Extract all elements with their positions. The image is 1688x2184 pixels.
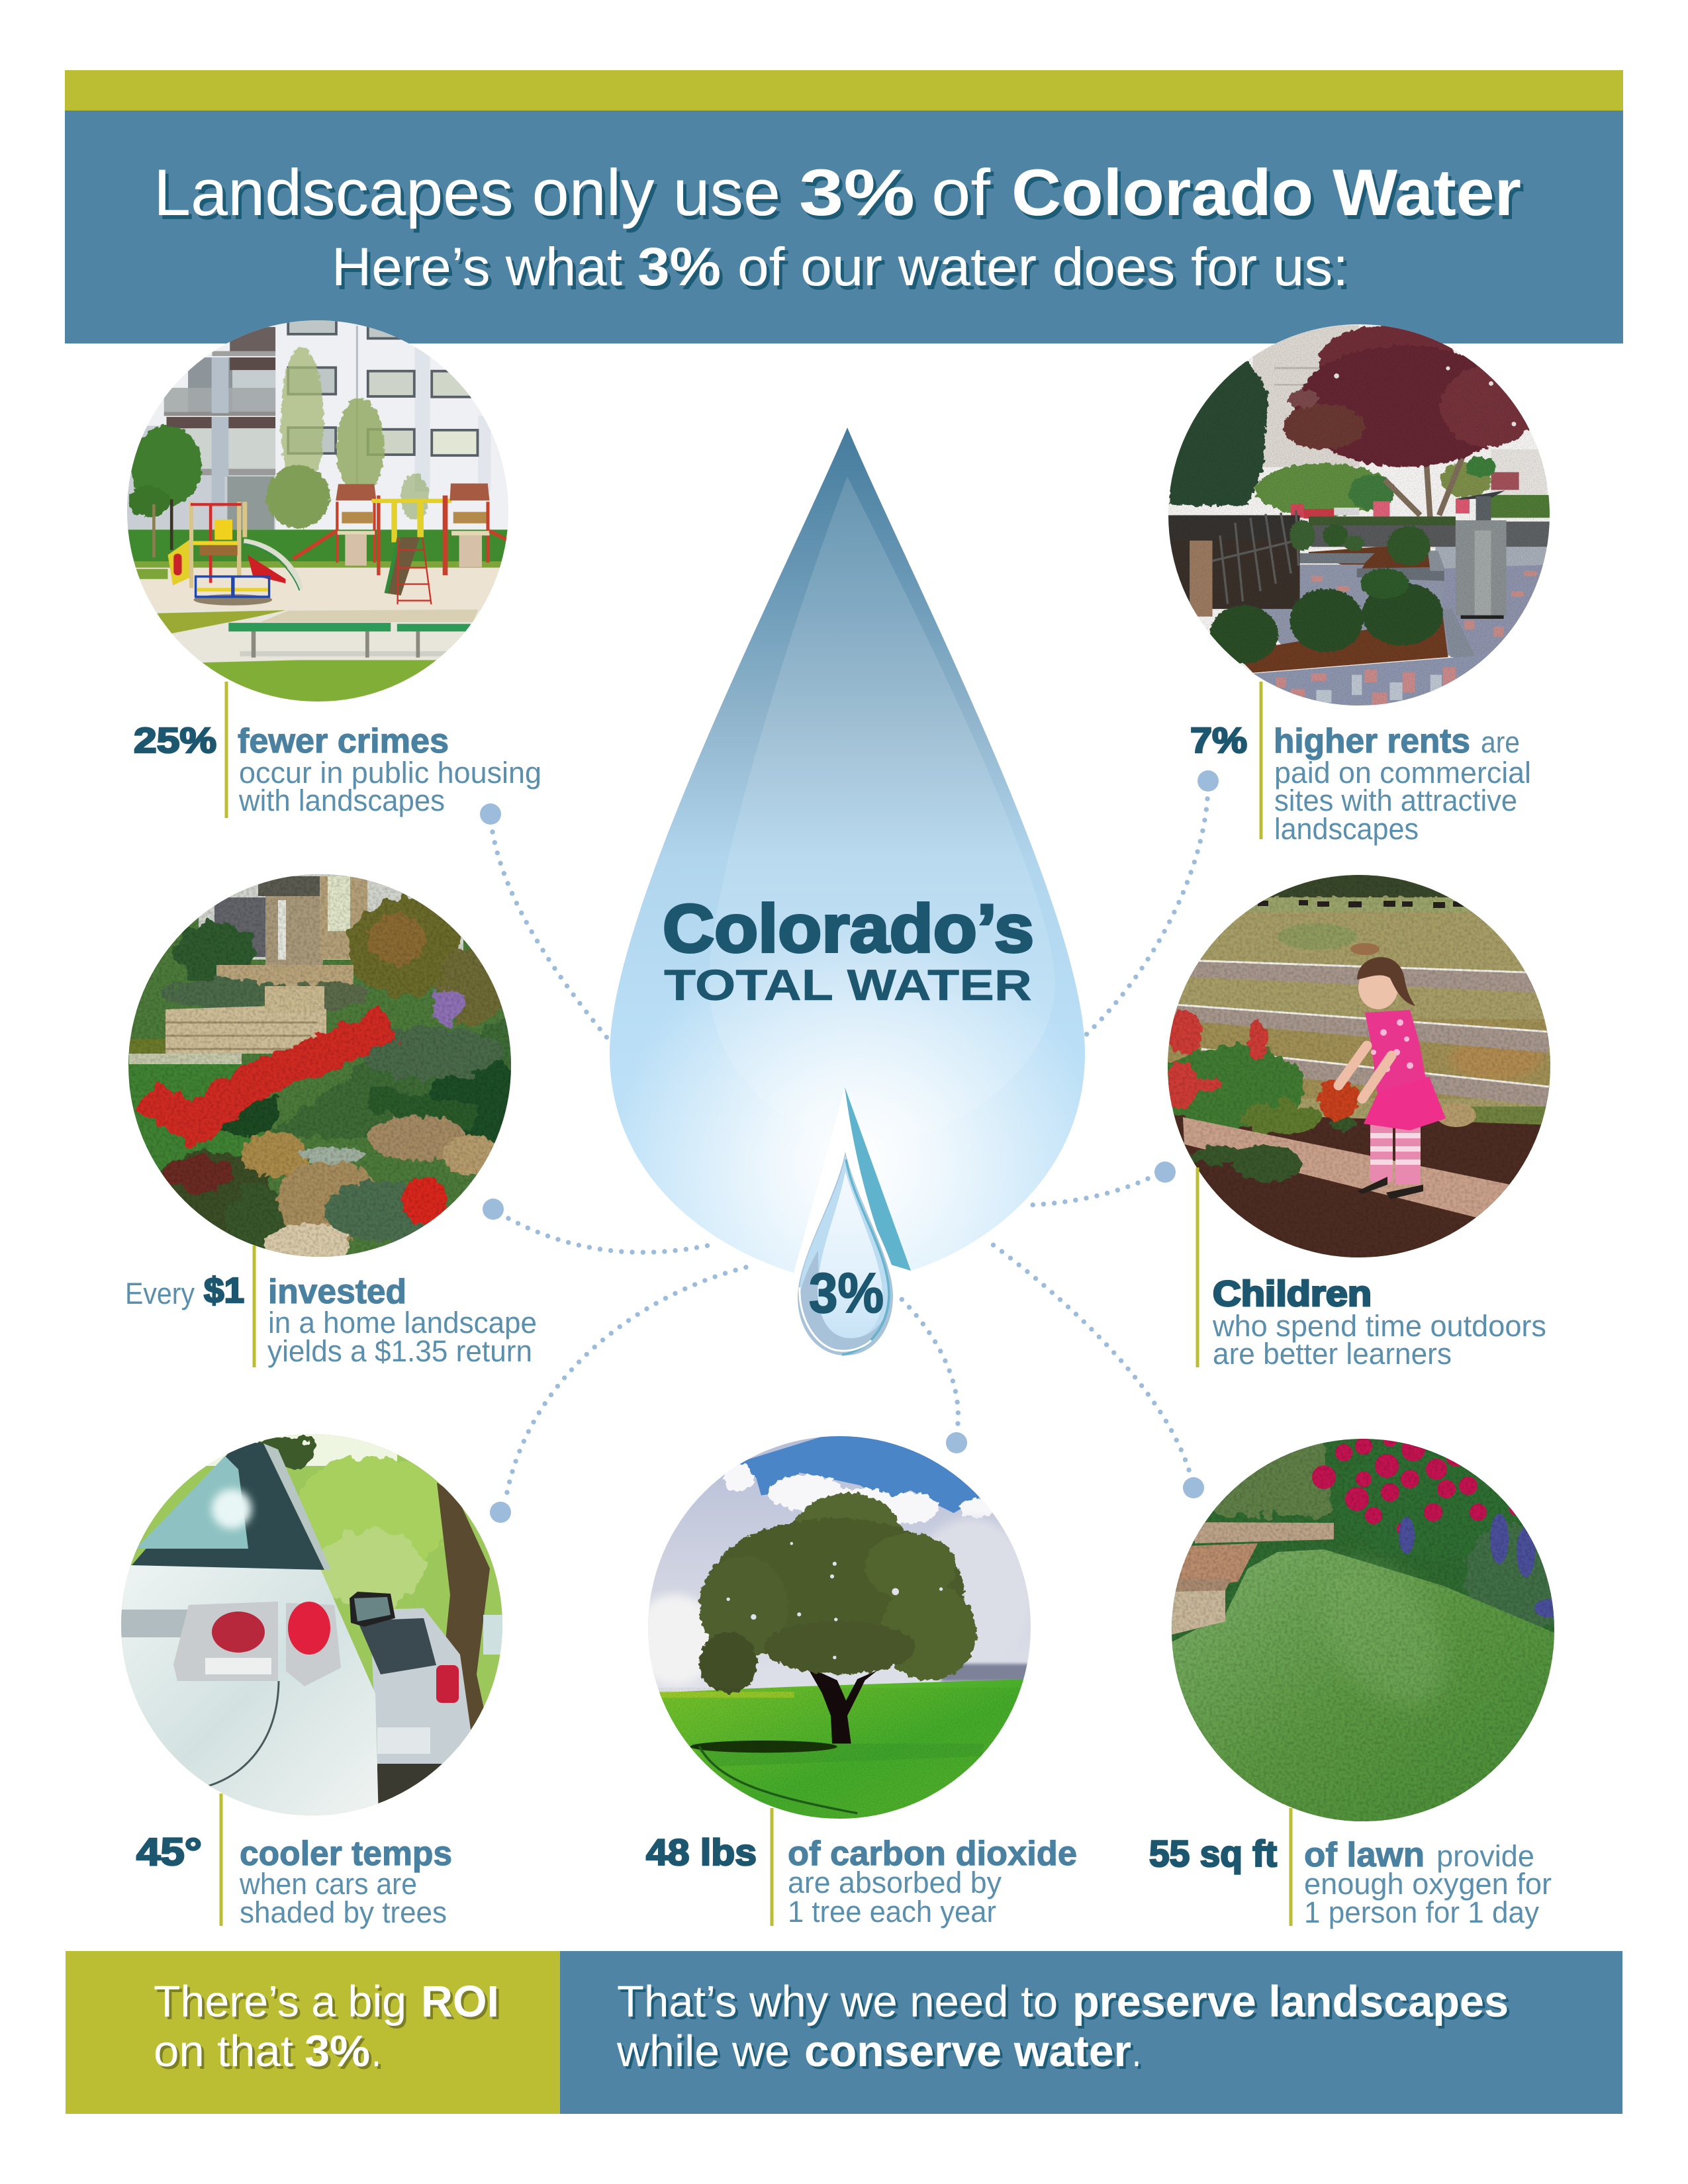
stat: 45 degrees cooler temps: cooler temps (240, 1835, 452, 1873)
dotted connector: lawn stat (990, 1242, 1204, 1498)
photo: cars shaded by trees (119, 1433, 510, 1820)
text: That's why we need to preserve landscapes while we conserve water (616, 1977, 1509, 2076)
title: Landscapes only use 3% of Colorado Water (154, 156, 1521, 229)
stat: children: who spend time outdoors (1212, 1309, 1546, 1343)
text: That's why we need to preserve landscapes while we conserve water: . (1132, 2026, 1141, 2076)
text: There's a big ROI on that 3%: on that (154, 2026, 293, 2076)
text: There's a big ROI on that 3%: There’s a big (154, 1977, 406, 2026)
stat: 48 lbs of carbon dioxide: 1 tree each year (788, 1895, 996, 1929)
subtitle: Here's what 3% of our water does for us: Here’s what (332, 237, 622, 297)
stat: 55 sq ft of lawn: 55 sq ft (1149, 1833, 1277, 1874)
dotted connector: cooler temps stat (490, 1267, 748, 1523)
stat: every $1 invested: Every (125, 1277, 195, 1310)
subtitle: Here's what 3% of our water does for us: 3% (637, 237, 721, 297)
title: Landscapes only use 3% of Colorado Water: of (931, 156, 991, 229)
stat: 7% higher rents: higher rents (1274, 722, 1470, 760)
stat: every $1 invested: $1 (204, 1271, 244, 1310)
dotted connector: children stat (1027, 1161, 1176, 1205)
photo: home landscape with red flowers (126, 874, 523, 1263)
small 3% drop (792, 1147, 898, 1361)
central water drop: Colorado's total water (610, 428, 1085, 1273)
dotted connector: crime stat (480, 803, 610, 1042)
text: That's why we need to preserve landscapes while we conserve water: preserve landscapes (1072, 1977, 1509, 2026)
text: That's why we need to preserve landscapes while we conserve water: conserve water (804, 2026, 1131, 2076)
stat: every $1 invested: in a home landscape (268, 1306, 537, 1340)
stat: children: are better learners (1213, 1337, 1452, 1371)
text: That's why we need to preserve landscapes while we conserve water: while we (616, 2026, 790, 2076)
stat: 45 degrees cooler temps: shaded by trees (240, 1895, 447, 1929)
text: That's why we need to preserve landscapes while we conserve water: That’s why we need to (617, 1977, 1058, 2026)
label: 3%: 3% (809, 1262, 884, 1325)
text: There's a big ROI on that 3%: ROI (421, 1977, 499, 2026)
photo: child in garden (1164, 874, 1556, 1264)
stat: 55 sq ft of lawn: provide (1436, 1839, 1534, 1873)
stat: 25% fewer crimes: occur in public housing (239, 756, 541, 790)
stat: 7% higher rents: sites with attractive (1274, 784, 1517, 817)
stat: 7% higher rents: landscapes (1274, 812, 1419, 846)
stat: 48 lbs of carbon dioxide (646, 1808, 1077, 1929)
stat: 48 lbs of carbon dioxide: of carbon dioxide (788, 1835, 1077, 1873)
stat: 7% higher rents: 7% (1190, 721, 1247, 760)
dotted connector: home investment stat (483, 1199, 711, 1252)
bottom panel: preserve landscapes (560, 1951, 1622, 2114)
photo: playground at public housing (116, 314, 513, 711)
stat: 48 lbs of carbon dioxide: 48 lbs (646, 1831, 757, 1873)
stat: children (1196, 1167, 1546, 1371)
stat: 48 lbs of carbon dioxide: are absorbed by (788, 1866, 1002, 1899)
green top bar (65, 70, 1623, 111)
stat: every $1 invested (125, 1246, 537, 1368)
photo: tree in green field (632, 1430, 1039, 1827)
label: TOTAL WATER: TOTAL WATER (664, 960, 1032, 1009)
stat: children: Children (1213, 1274, 1372, 1314)
stat: 25% fewer crimes (134, 682, 541, 818)
stat: 25% fewer crimes: with landscapes (238, 784, 445, 817)
stat: 55 sq ft of lawn: enough oxygen for (1304, 1867, 1552, 1901)
stat: 7% higher rents: are (1481, 725, 1520, 759)
stat: 7% higher rents: paid on commercial (1274, 756, 1531, 790)
stat: 7% higher rents (1190, 682, 1531, 846)
title: Landscapes only use 3% of Colorado Water: Landscapes only use (154, 156, 780, 229)
stat: 45 degrees cooler temps: when cars are (239, 1867, 417, 1901)
child (1338, 943, 1446, 1199)
photo: commercial site landscape (1162, 318, 1559, 715)
teal wedge (845, 1087, 911, 1271)
stat: 55 sq ft of lawn: of lawn (1304, 1836, 1425, 1874)
stat: 45 degrees cooler temps (136, 1794, 452, 1929)
stat: 25% fewer crimes: 25% (134, 721, 216, 760)
stat: every $1 invested: yields a $1.35 return (267, 1334, 532, 1368)
label: Colorado's: Colorado’s (663, 891, 1034, 966)
title: Landscapes only use 3% of Colorado Water: Colorado Water (1011, 156, 1521, 229)
title: Landscapes only use 3% of Colorado Water: 3% (799, 156, 915, 229)
stat: every $1 invested: invested (268, 1273, 406, 1311)
dotted connector: rents stat (1083, 770, 1219, 1038)
photo: lawn with flowers (1168, 1432, 1569, 1827)
text: There's a big ROI on that 3% (154, 1977, 499, 2076)
text: There's a big ROI on that 3%: 3% (305, 2026, 370, 2076)
subtitle: Here's what 3% of our water does for us: of our water does for us: (737, 237, 1348, 297)
subtitle: Here's what 3% of our water does for us (332, 237, 1348, 297)
header panel (65, 111, 1623, 343)
stat: 55 sq ft of lawn (1149, 1808, 1552, 1929)
stat: 45 degrees cooler temps: 45° (136, 1831, 202, 1874)
dotted connector: carbon dioxide stat (898, 1296, 967, 1453)
stat: 25% fewer crimes: fewer crimes (238, 722, 449, 760)
bottom panel: ROI (66, 1951, 560, 2114)
text: There's a big ROI on that 3%: . (371, 2026, 381, 2076)
stat: 55 sq ft of lawn: 1 person for 1 day (1304, 1895, 1539, 1929)
